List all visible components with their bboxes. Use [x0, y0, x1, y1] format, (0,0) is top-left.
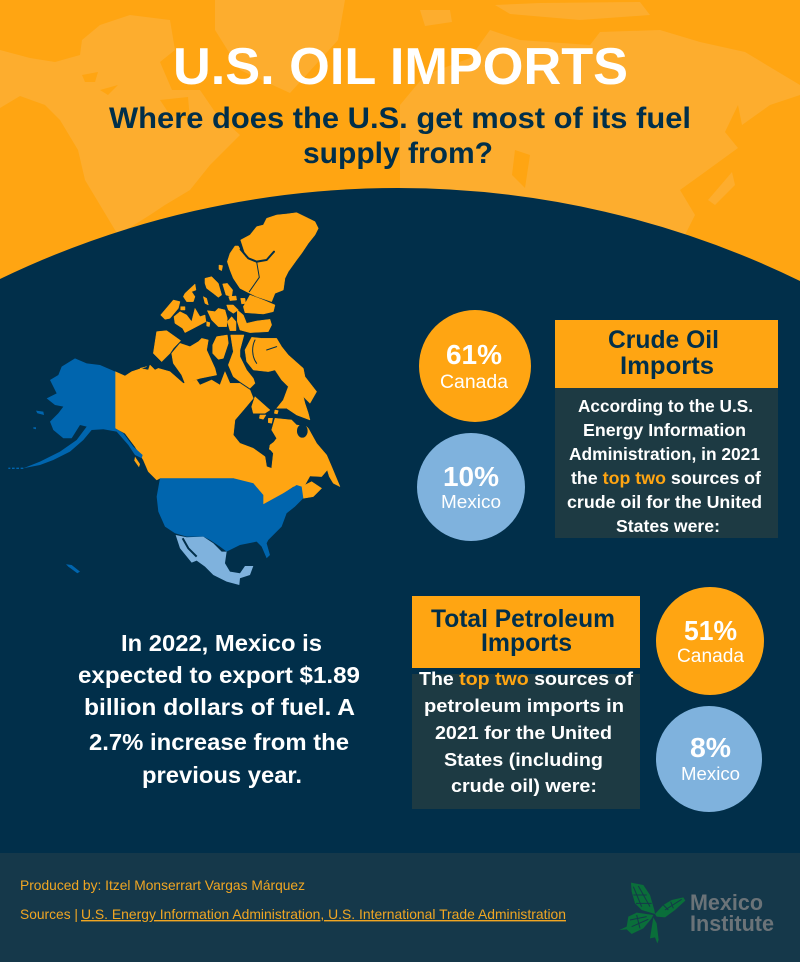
- text: crude oil description: States were:: [616, 516, 720, 536]
- subtitle: [109, 102, 691, 170]
- panel: crude oil imports: [555, 320, 778, 538]
- text: petroleum description: States (including: [444, 749, 603, 770]
- text: crude oil description: the top two sources of: [571, 468, 761, 488]
- circle: Canada 51% petroleum: Canada: [677, 646, 744, 667]
- text: Mexico fuel export callout: billion dollars of fuel. A: [84, 694, 355, 720]
- title: U.S. OIL IMPORTS: [173, 38, 628, 96]
- text: crude oil description: Energy Information: [583, 420, 746, 440]
- subtitle: Where does the U.S. get most of its fuel: [109, 102, 691, 135]
- circle: Mexico 10% crude: Mexico: [441, 492, 501, 512]
- heading: crude oil imports: Crude Oil: [608, 326, 719, 354]
- arctic islands north: [161, 265, 275, 333]
- circle: Mexico 10% crude: [417, 433, 525, 541]
- heading: crude oil imports: [608, 326, 719, 380]
- text: Mexico fuel export callout: [78, 630, 360, 788]
- map of North America: [8, 213, 340, 585]
- heading: total petroleum imports: [431, 605, 615, 657]
- Alaska: [8, 358, 143, 468]
- text: sources: Sources |: [20, 906, 78, 922]
- text: sources: U.S. Energy Information Administration, U.S. International Trade Administration: [81, 906, 566, 922]
- Mexico: [176, 535, 253, 585]
- text: petroleum description: [419, 668, 634, 796]
- heading: crude oil imports: Imports: [620, 352, 714, 380]
- text: petroleum description: The top two sources of: [419, 668, 634, 689]
- Vancouver Island: [134, 457, 140, 467]
- text: crude oil description: According to the U.S.: [578, 396, 753, 416]
- dark globe curve: [0, 188, 800, 290]
- text: producer credit: Produced by: Itzel Monserrart Vargas Márquez: [20, 877, 305, 893]
- panel: total petroleum imports: [412, 596, 640, 809]
- contiguous United States: [66, 478, 303, 573]
- text: crude oil description: crude oil for the United: [567, 492, 762, 512]
- circle: Canada 61% crude: 61%: [446, 339, 502, 370]
- text: crude oil description: [567, 396, 762, 536]
- circle: Mexico 8% petroleum: [656, 706, 762, 812]
- text: Mexico fuel export callout: previous year.: [142, 762, 302, 788]
- text: Mexico Institute logo wordmark: [690, 890, 774, 936]
- circle: Canada 51% petroleum: [656, 587, 764, 695]
- text: petroleum description: crude oil) were:: [451, 775, 597, 796]
- text: Mexico fuel export callout: expected to export $1.89: [78, 662, 360, 688]
- text: crude oil description: Administration, in 2021: [569, 444, 760, 464]
- circle: Canada 61% crude: [419, 310, 531, 422]
- Gulf of California: [183, 538, 197, 557]
- Canada water details: [241, 249, 277, 363]
- mainland and lower arctic: [115, 331, 340, 504]
- circle: Canada 51% petroleum: 51%: [684, 615, 737, 646]
- circle: Mexico 8% petroleum: Mexico: [681, 764, 740, 784]
- text: petroleum description: petroleum imports in: [424, 695, 624, 716]
- circle: Canada 61% crude: Canada: [440, 372, 508, 393]
- Canada: [115, 213, 340, 504]
- text: Mexico fuel export callout: In 2022, Mexico is: [121, 630, 322, 656]
- icon: green butterfly logo: [619, 883, 685, 943]
- footer panel: [0, 853, 800, 962]
- text: Mexico fuel export callout: 2.7% increase from the: [89, 729, 349, 755]
- faint map water details: [82, 72, 530, 188]
- Ellesmere island: [227, 213, 318, 302]
- text: petroleum description: 2021 for the United: [435, 722, 612, 743]
- heading: total petroleum imports: Total Petroleum: [431, 605, 615, 633]
- circle: Mexico 10% crude: 10%: [443, 461, 499, 492]
- text: Mexico Institute logo wordmark: Institute: [690, 911, 774, 936]
- Ungava Bay water: [297, 424, 308, 438]
- subtitle: supply from?: [303, 137, 493, 170]
- header panel: orange background: [0, 0, 800, 290]
- heading: total petroleum imports: Imports: [481, 629, 572, 657]
- circle: Mexico 8% petroleum: 8%: [690, 732, 731, 763]
- text: Mexico Institute logo wordmark: Mexico: [690, 890, 763, 915]
- faint world map background: [0, 0, 800, 280]
